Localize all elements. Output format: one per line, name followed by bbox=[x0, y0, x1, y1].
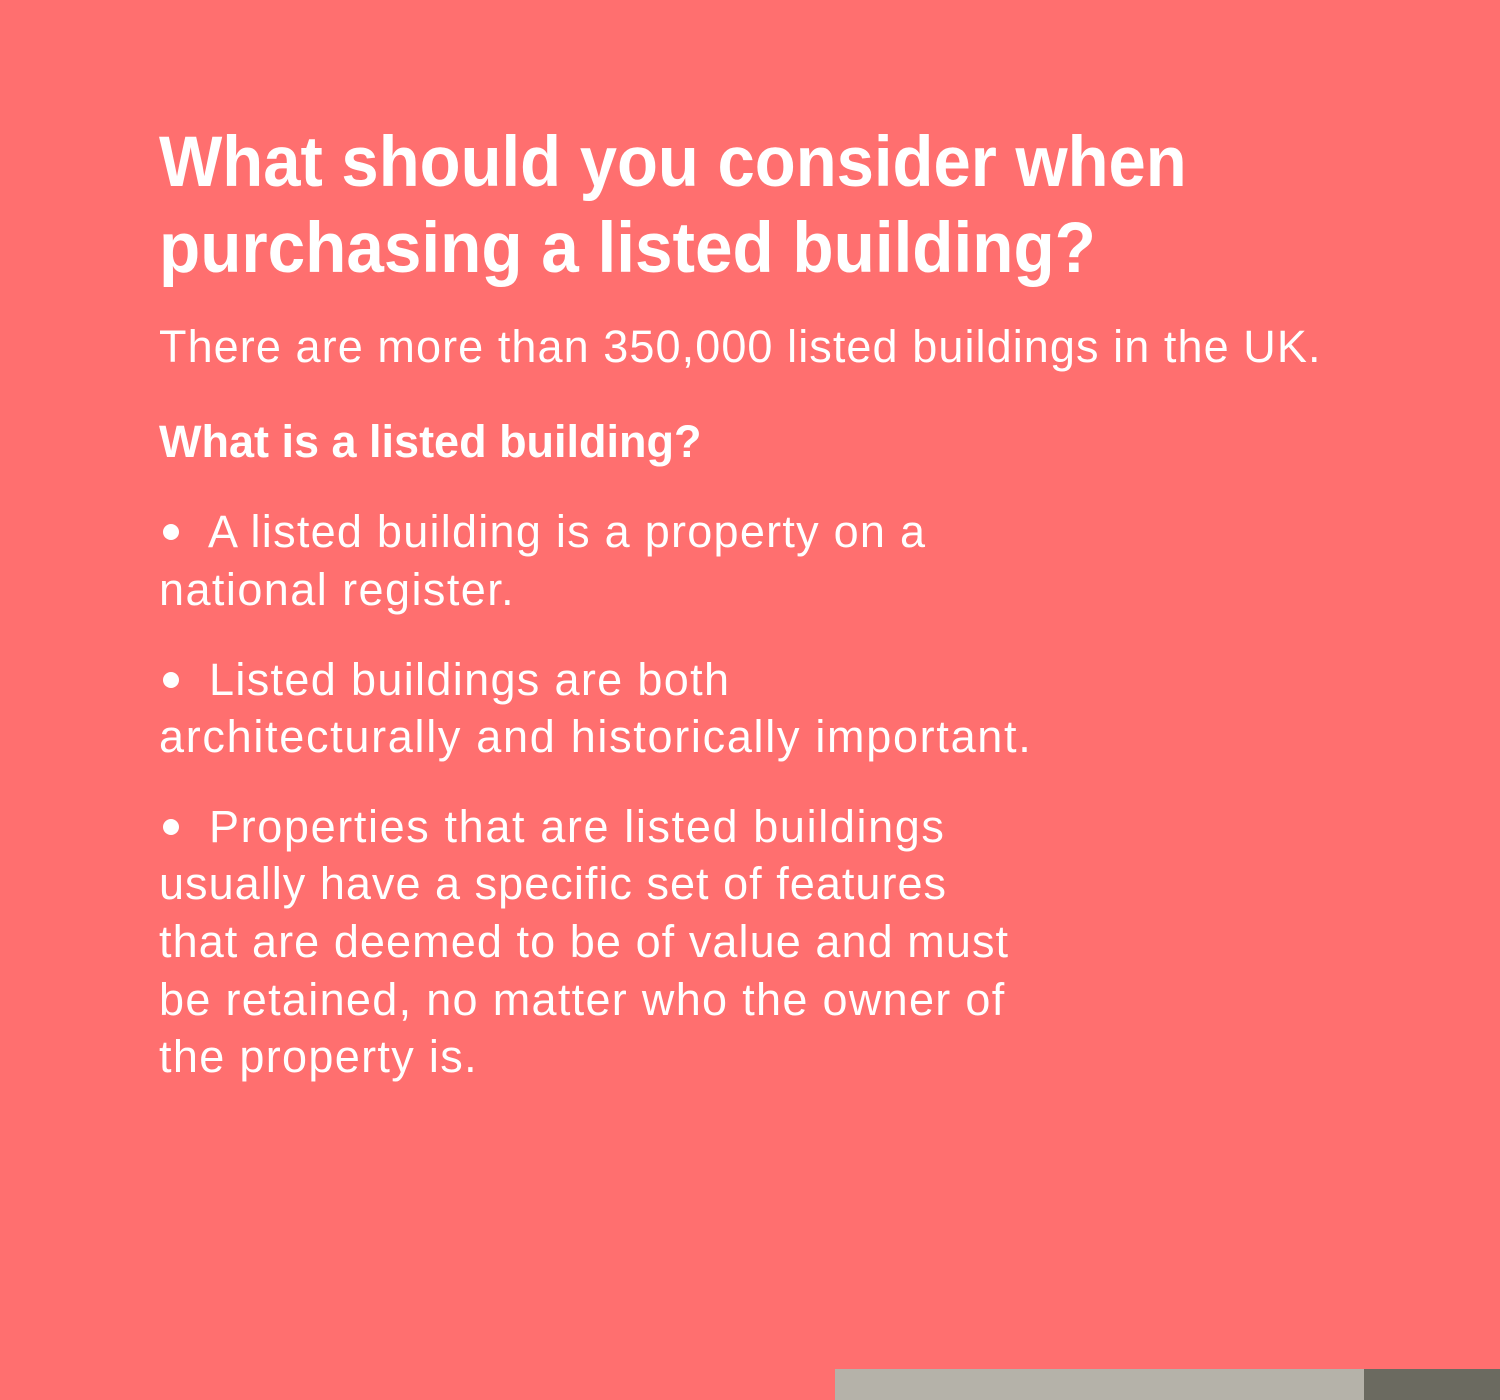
title: What should you consider when bbox=[159, 123, 1187, 202]
bullet 3: usually have a specific set of features bbox=[159, 858, 947, 909]
intro text: There are more than 350,000 listed buildings in the UK. bbox=[159, 321, 1322, 372]
title: purchasing a listed building? bbox=[159, 209, 1096, 288]
footer bar: dark segment bbox=[1364, 1369, 1500, 1400]
title bbox=[159, 123, 1187, 288]
bullet 1 bbox=[159, 506, 926, 615]
bullet 3: the property is. bbox=[159, 1031, 478, 1082]
bullet 3: that are deemed to be of value and must bbox=[159, 916, 1009, 967]
footer bar: light segment bbox=[835, 1369, 1364, 1400]
bullet 1: national register. bbox=[159, 564, 515, 615]
bullet 2: Listed buildings are both bbox=[209, 654, 730, 705]
bullet 3: be retained, no matter who the owner of bbox=[159, 974, 1006, 1025]
subheading: What is a listed building? bbox=[159, 416, 702, 467]
bullet 3 bbox=[159, 801, 1009, 1082]
bullet 2 bbox=[159, 654, 1032, 762]
bullet 1: A listed building is a property on a bbox=[208, 506, 926, 557]
bullet 3: Properties that are listed buildings bbox=[209, 801, 946, 852]
bullet 2: architecturally and historically important. bbox=[159, 711, 1032, 762]
